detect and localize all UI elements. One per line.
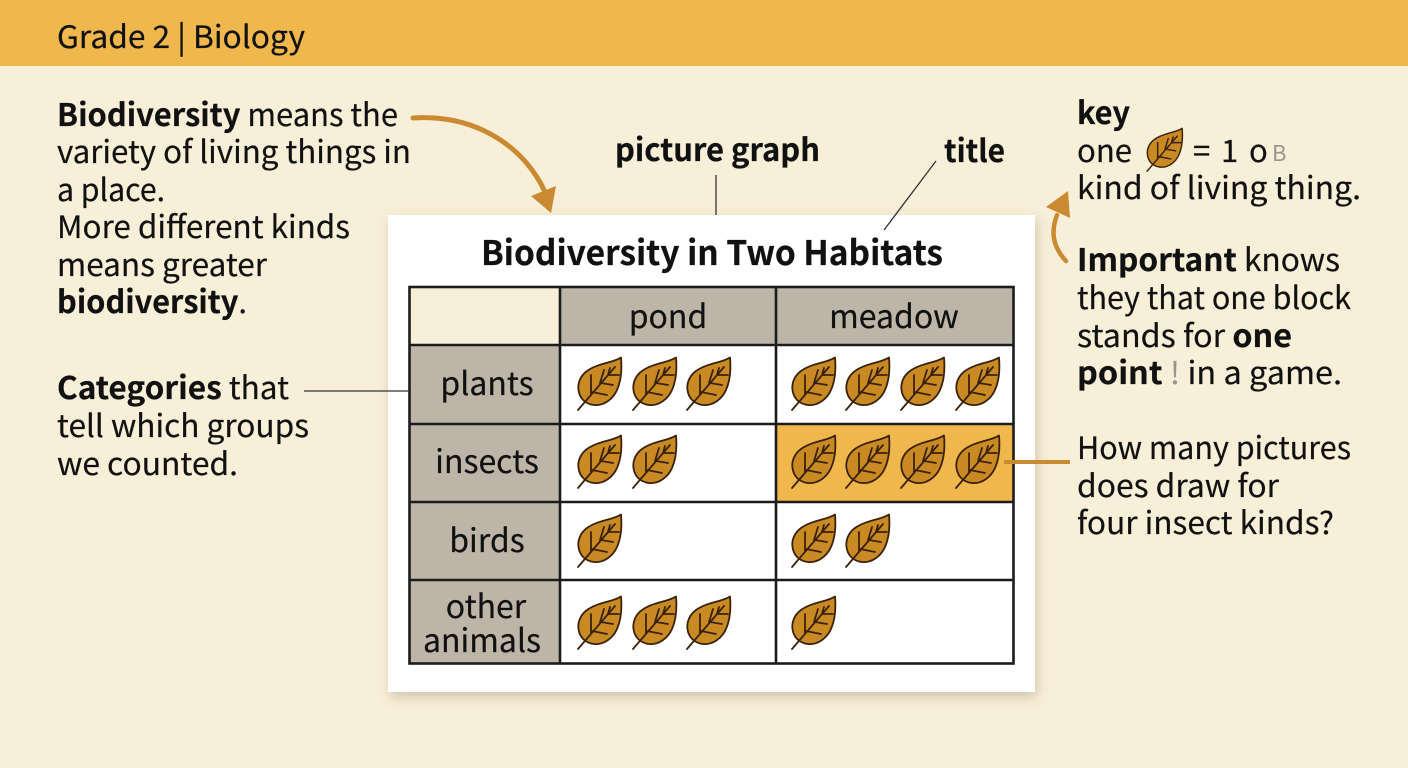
- row labels: plants: [440, 359, 534, 405]
- connector: title: [884, 161, 936, 230]
- text block: biodiversity definition: means greater: [57, 240, 268, 285]
- leaves: birds: [578, 514, 889, 567]
- column headers: pond: [629, 292, 707, 338]
- text block: question: does draw for: [1077, 461, 1280, 506]
- text block: categories: Categories that: [57, 363, 289, 408]
- table: [409, 286, 1014, 664]
- text block: key: kind of living thing.: [1077, 163, 1361, 208]
- row labels: [423, 359, 541, 662]
- text block: important: [1077, 235, 1351, 393]
- arrow: biodiversity to graph: [413, 118, 556, 213]
- leaves: insects: [578, 436, 999, 488]
- text block: key: [1077, 88, 1361, 208]
- row labels: birds: [449, 516, 525, 562]
- text block: biodiversity definition: variety of living things in: [57, 127, 411, 172]
- text block: categories: we counted.: [57, 439, 238, 484]
- text block: key: B: [1272, 136, 1286, 168]
- text block: categories: tell which groups: [57, 401, 309, 446]
- text block: biodiversity definition: Biodiversity means the: [57, 90, 398, 135]
- header text: Grade 2 | Biology: [57, 12, 305, 57]
- column headers: meadow: [829, 292, 959, 338]
- text block: important: stands for one: [1077, 311, 1292, 356]
- text block: question: How many pictures: [1077, 423, 1351, 468]
- text block: categories: [57, 363, 309, 484]
- row labels: other: [446, 582, 527, 628]
- text block: question: [1077, 423, 1351, 543]
- text block: important: they that one block: [1077, 273, 1351, 318]
- row labels: insects: [435, 437, 539, 483]
- text block: biodiversity definition: [57, 90, 411, 322]
- leaves: other animals: [578, 596, 835, 649]
- column headers: [629, 292, 959, 338]
- graph card: [388, 215, 1035, 692]
- text block: important: Important knows: [1077, 235, 1340, 280]
- header band: [0, 0, 1408, 66]
- text block: question: four insect kinds?: [1077, 498, 1334, 543]
- text block: key: 1: [1221, 126, 1238, 171]
- text block: key: one: [1077, 126, 1132, 171]
- arrow: important to key: [1046, 191, 1070, 261]
- text block: biodiversity definition: a place.: [57, 165, 165, 210]
- text block: key: =: [1193, 126, 1210, 171]
- connector: picture graph: [715, 175, 717, 215]
- label: picture graph: picture graph: [615, 125, 820, 170]
- connector: categories: [304, 390, 409, 392]
- text block: important: point ! in a game.: [1077, 348, 1342, 393]
- leaves: plants: [578, 358, 999, 410]
- text block: key: o: [1249, 126, 1268, 171]
- label: title: title: [944, 126, 1005, 171]
- text block: key: key: [1077, 88, 1130, 133]
- text block: biodiversity definition: More different kinds: [57, 202, 350, 247]
- connector: insects highlight: [1004, 460, 1070, 464]
- text block: biodiversity definition: biodiversity.: [57, 277, 247, 322]
- row labels: animals: [423, 616, 541, 662]
- graph title: Biodiversity in Two Habitats: [481, 226, 943, 275]
